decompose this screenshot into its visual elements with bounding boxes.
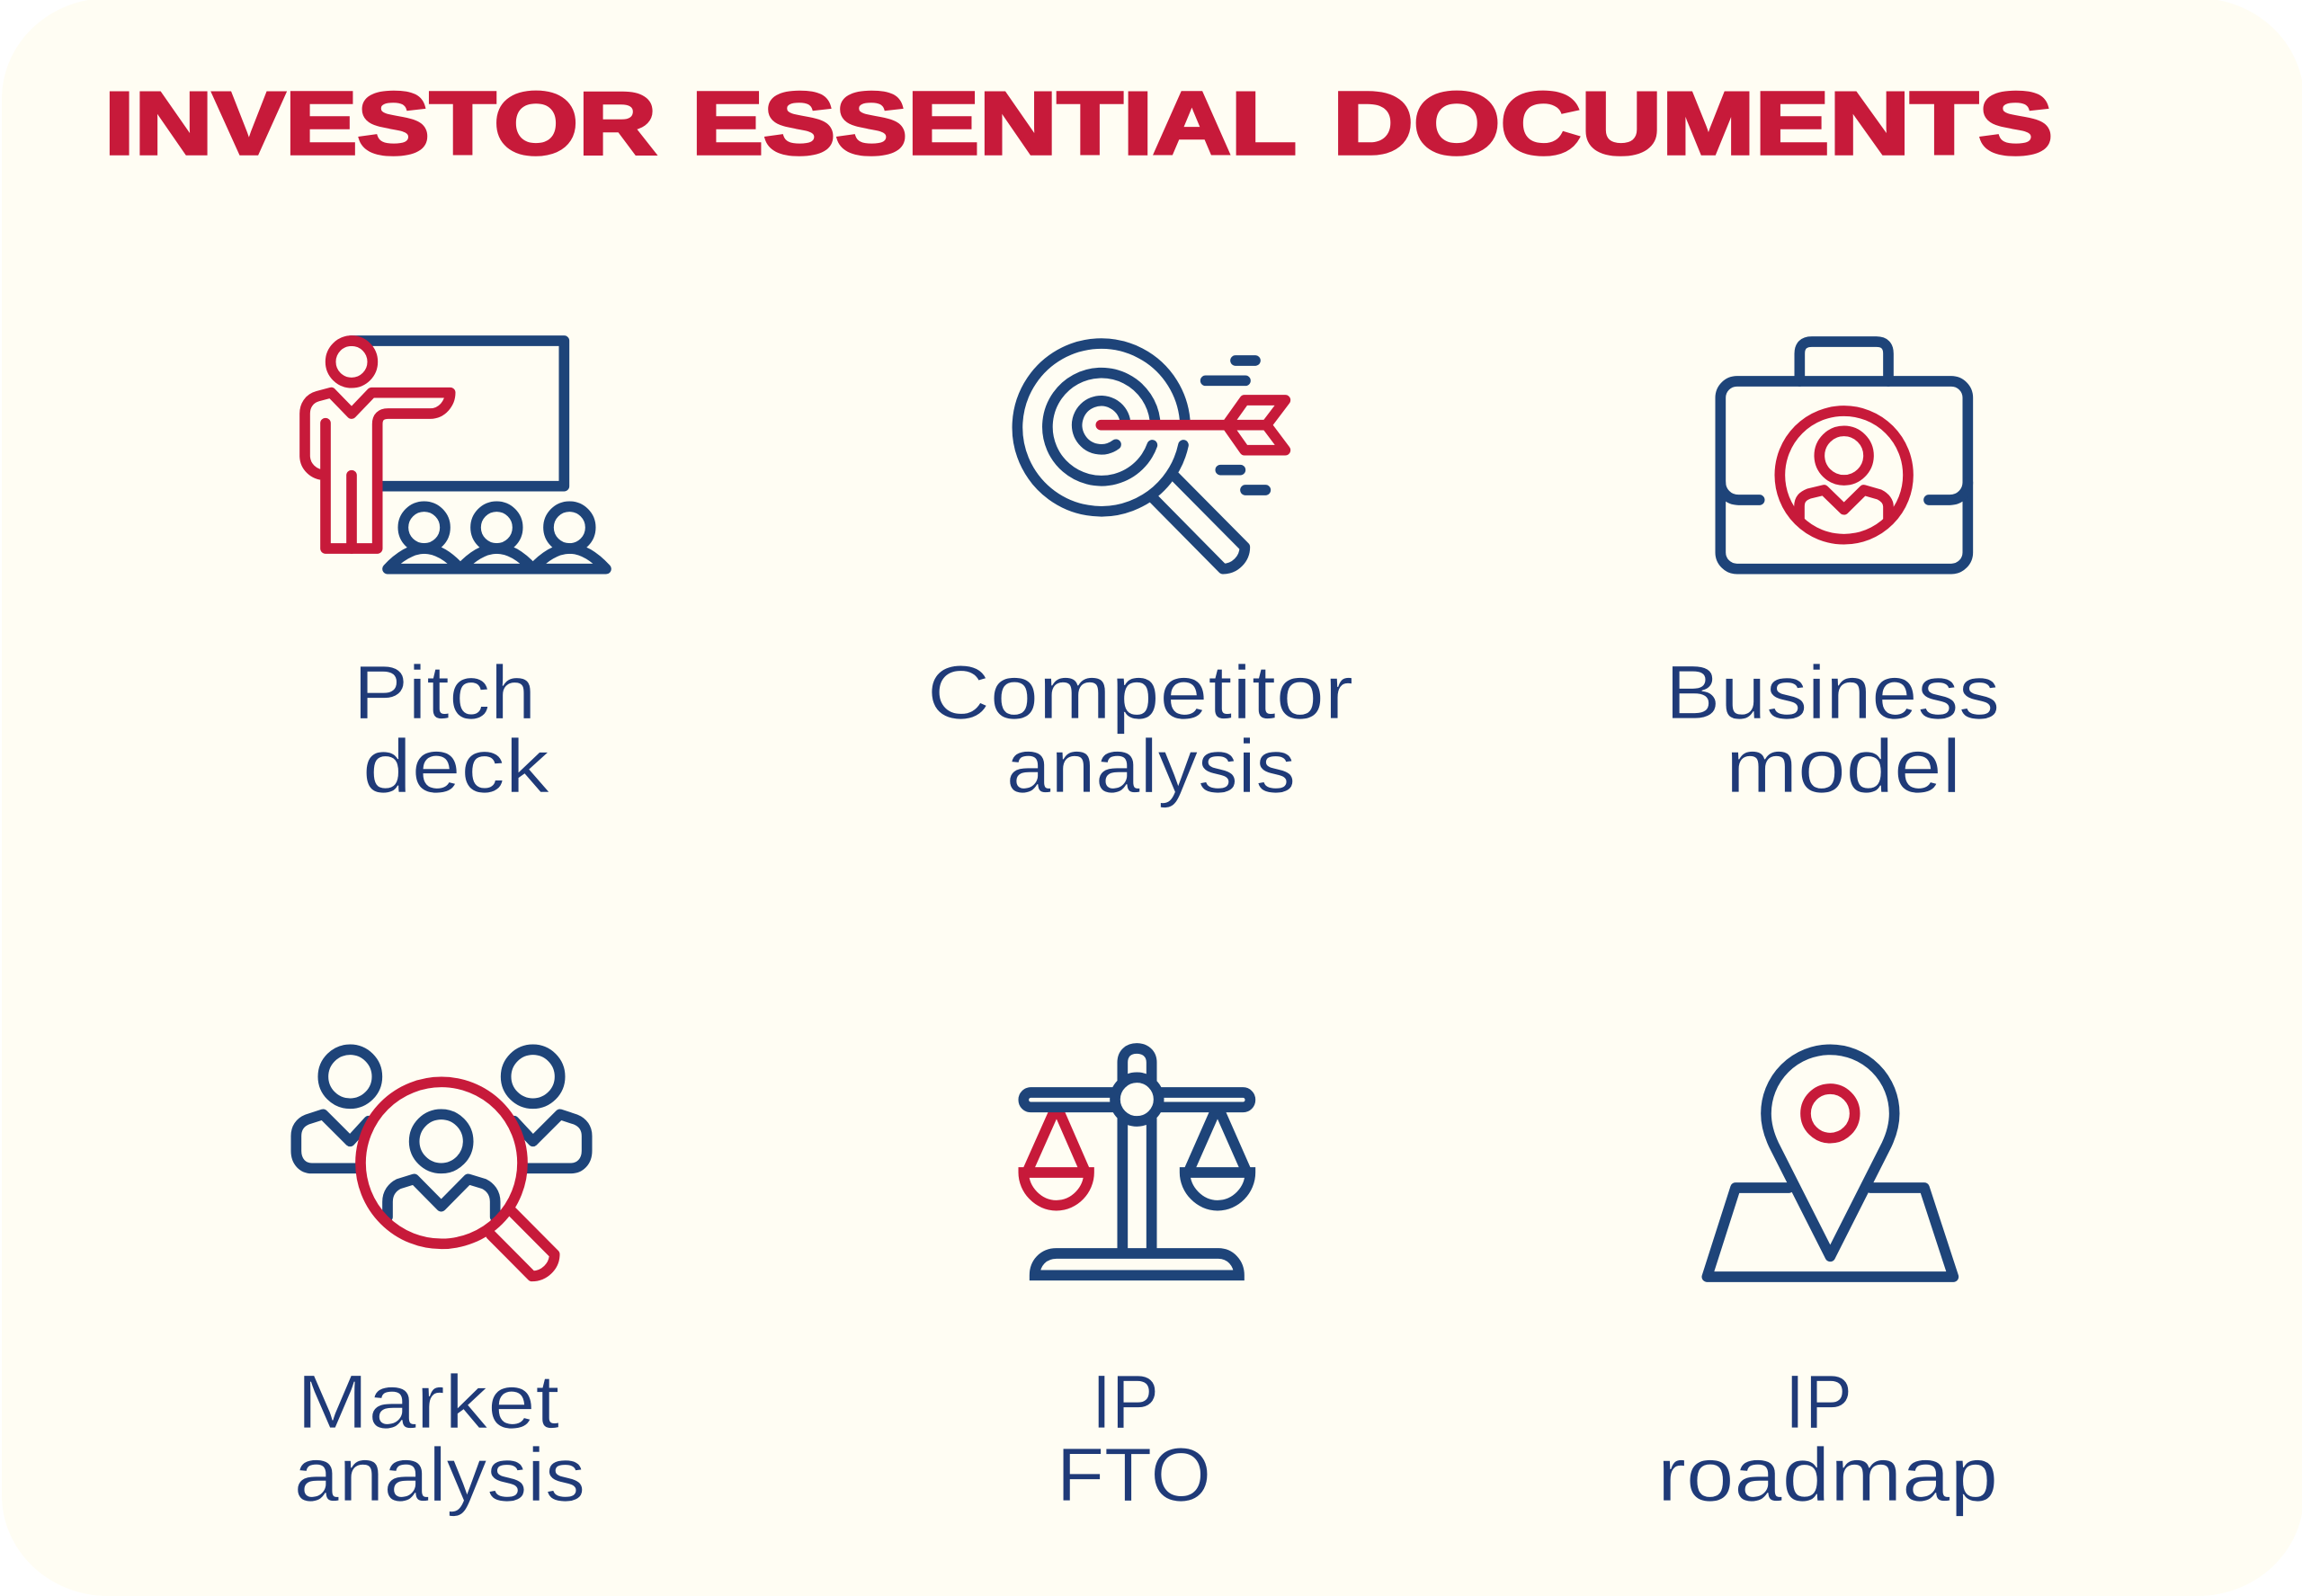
label: Competitor analysis: analysis — [1006, 724, 1296, 808]
icon: pitch deck presenter — [305, 341, 606, 569]
label: Business model: model — [1726, 724, 1961, 808]
title: INVESTOR — [104, 74, 656, 173]
icon: market analysis — [296, 1049, 587, 1276]
label: Competitor analysis: Competitor — [927, 650, 1353, 735]
label: Competitor analysis — [927, 650, 1353, 808]
icon: competitor target — [1017, 343, 1285, 569]
label: IP roadmap: roadmap — [1657, 1432, 1998, 1517]
label: IP FTO: IP — [1092, 1360, 1159, 1444]
title: ESSENTIAL — [691, 74, 1297, 173]
title: DOCUMENTS — [1333, 74, 2053, 173]
icon: IP roadmap map pin — [1707, 1049, 1953, 1277]
label: Business model — [1665, 650, 2000, 808]
label: Market analysis: Market — [297, 1360, 559, 1444]
title — [104, 74, 2053, 173]
label: Pitch deck: Pitch — [353, 650, 536, 735]
label: Pitch deck — [353, 650, 550, 808]
label: IP roadmap: IP — [1785, 1360, 1852, 1444]
label: Market analysis — [294, 1360, 585, 1517]
label: IP FTO: FTO — [1057, 1432, 1211, 1517]
label: Business model: Business — [1665, 650, 2000, 735]
label: IP FTO — [1057, 1360, 1211, 1517]
label: IP roadmap — [1657, 1360, 1998, 1517]
label: Pitch deck: deck — [362, 724, 550, 808]
label: Market analysis: analysis — [294, 1432, 585, 1517]
icon: IP FTO scales — [1023, 1048, 1250, 1275]
icon: business model briefcase — [1720, 342, 1967, 569]
